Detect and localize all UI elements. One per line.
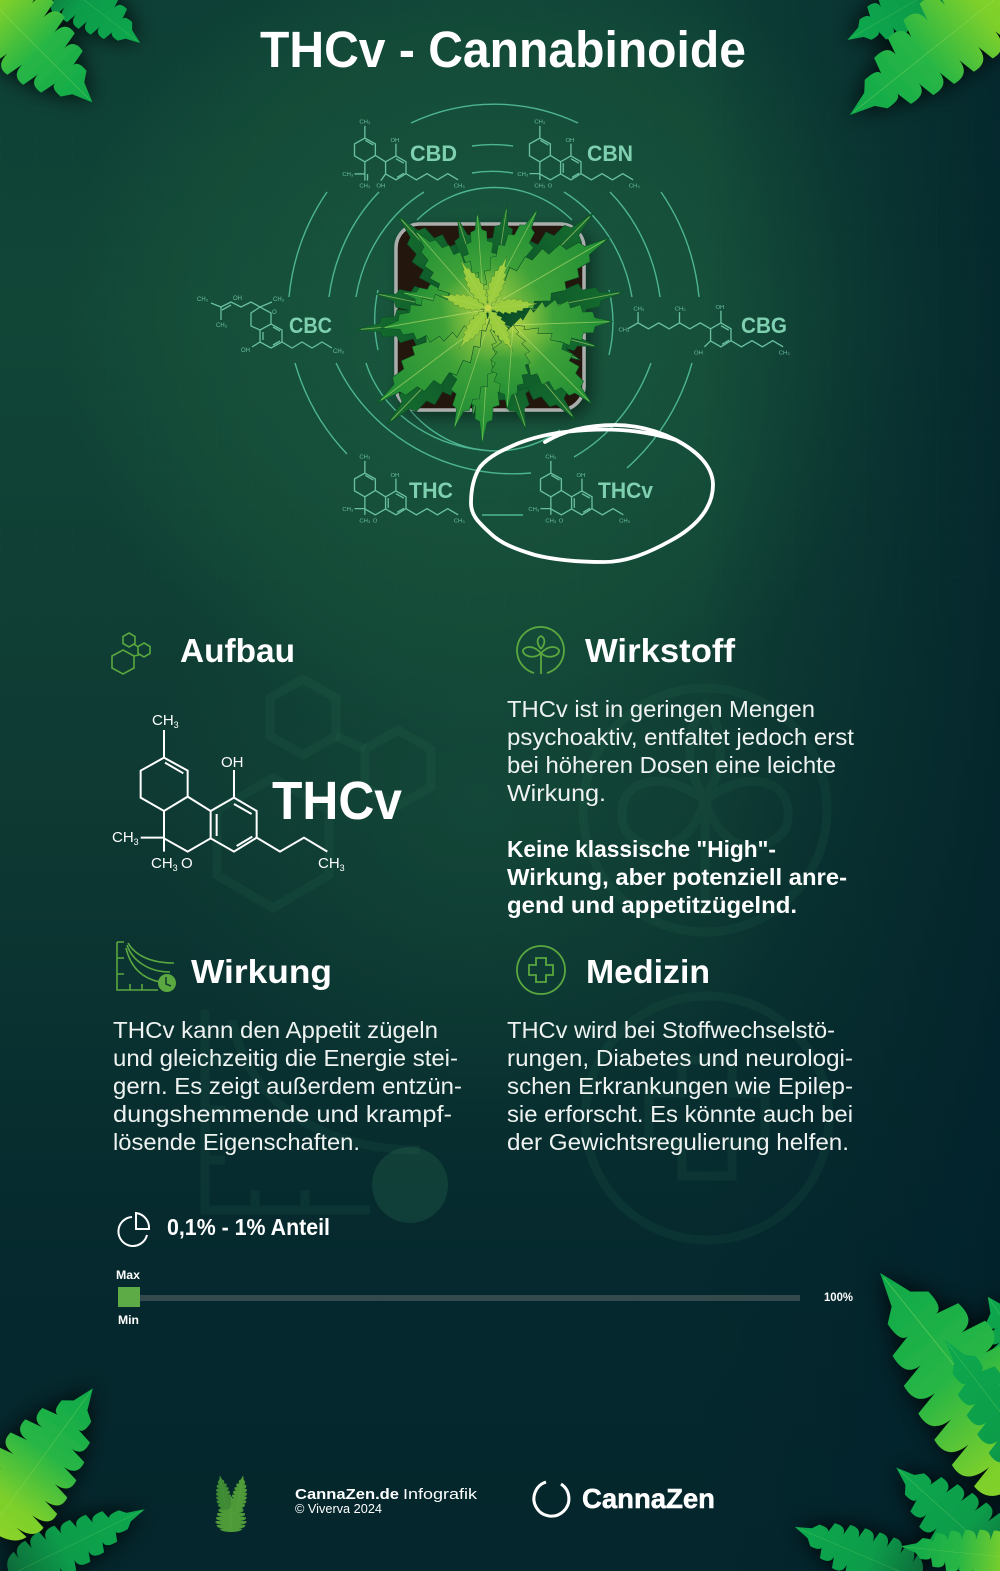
molecule: THCv: CH₃: [528, 507, 540, 513]
molecule: CBN: [517, 120, 640, 189]
label: CBG: CBG: [741, 313, 787, 338]
THCv structure formula: 3: [134, 837, 139, 847]
share bar: [116, 1270, 853, 1327]
corner leaves: top right: [822, 0, 1000, 150]
text: Wirkung: [113, 1017, 462, 1155]
THCv structure formula: OH: [221, 754, 244, 771]
molecule: CBG: OH: [694, 350, 703, 356]
text: Medizin: schen Erkrankungen wie Epilep-: [507, 1073, 853, 1099]
watermark icons: [205, 679, 829, 1240]
icon: plant in circle: [517, 627, 564, 674]
molecule: CBC: OH: [233, 296, 242, 302]
THCv structure formula: O: [181, 855, 193, 872]
molecule: THCv: CH₃: [545, 518, 557, 524]
text: Wirkstoff: THCv ist in geringen Mengen: [507, 696, 815, 722]
molecule: THC: CH₃: [454, 518, 465, 524]
molecule: CBC: CH₃: [273, 297, 285, 303]
cannabis plant: [354, 193, 629, 446]
molecule: CBD: CH₃: [454, 183, 465, 189]
footer credit: © Viverva 2024: [295, 1501, 382, 1516]
molecule: CBC: CH₃: [216, 323, 228, 329]
molecule: THCv: CH₃: [619, 518, 631, 524]
footer credit: [295, 1486, 478, 1516]
heading: Aufbau: Aufbau: [180, 632, 295, 669]
share bar: Max: [116, 1270, 141, 1282]
corner leaves: top left: [0, 0, 158, 134]
THCv structure formula: CH: [112, 829, 134, 846]
text: Wirkstoff: gend und appetitzügelnd.: [507, 892, 797, 918]
share bar: 100%: [824, 1292, 853, 1304]
icon: hexagons: [112, 633, 150, 674]
text: Wirkstoff: bei höheren Dosen eine leichte: [507, 752, 836, 778]
label: THCv: THCv: [598, 478, 654, 503]
molecule: CBD: [342, 120, 465, 189]
text: Medizin: sie erforscht. Es könnte auch bei: [507, 1101, 853, 1127]
footer credit: CannaZen.de: [295, 1486, 399, 1503]
label: CBC: CBC: [289, 313, 332, 338]
icon: pie chart: [118, 1213, 149, 1246]
molecule: CBD: OH: [390, 138, 399, 144]
THCv structure formula: CH: [318, 855, 340, 872]
label: CBN: CBN: [587, 141, 633, 166]
text: Medizin: rungen, Diabetes und neurologi-: [507, 1045, 853, 1071]
THCv structure formula: CH: [151, 855, 173, 872]
molecule: CBN: CH₃: [517, 172, 529, 178]
molecule: CBD: CH₃: [342, 172, 354, 178]
text: Wirkung: lösende Eigenschaften.: [113, 1129, 360, 1155]
text: Medizin: der Gewichtsregulierung helfen.: [507, 1129, 849, 1155]
molecule: THC: CH₃: [359, 518, 371, 524]
share heading: 0,1% - 1% Anteil: [167, 1214, 330, 1240]
CannaZen logo: [534, 1482, 715, 1516]
icon: effect curve chart: [117, 942, 176, 992]
label: THC: THC: [409, 478, 453, 503]
molecule: CBG: CH₃: [619, 327, 630, 333]
heading: Wirkstoff: Wirkstoff: [585, 632, 736, 669]
THCv structure formula: [112, 712, 402, 873]
molecule: CBD: CH₃: [359, 120, 371, 126]
molecule: CBG: CH₃: [779, 350, 790, 356]
molecule: CBD: CH₃: [359, 183, 371, 189]
icon: medical cross: [517, 946, 565, 994]
molecule: THC: [342, 455, 465, 524]
corner leaves: bottom right: [783, 1233, 1000, 1571]
footer credit: Infografik: [403, 1486, 478, 1503]
molecule: CBN: OH: [565, 138, 574, 144]
plant pot: [396, 224, 584, 410]
molecule: CBC: OH: [241, 348, 250, 354]
heading: Wirkung: Wirkung: [191, 953, 332, 990]
molecule: CBG: CH₃: [675, 307, 686, 313]
molecule: THC: CH₃: [342, 507, 354, 513]
molecule: THCv: CH₃: [545, 455, 557, 461]
THCv structure formula: 3: [173, 863, 178, 873]
label: CBD: CBD: [410, 141, 457, 166]
molecule: CBC: O: [272, 310, 277, 316]
THCv structure formula: 3: [174, 720, 179, 730]
text: Wirkstoff: Keine klassische "High"-: [507, 836, 776, 862]
footer leaf logo: [212, 1474, 251, 1532]
molecule: THCv: OH: [576, 473, 585, 479]
concentric arcs: [289, 104, 699, 515]
molecule: CBC: CH₃: [333, 349, 345, 355]
molecule: THCv: [528, 455, 631, 524]
molecule: CBN: CH₃: [534, 183, 546, 189]
molecule: CBG: [619, 305, 790, 356]
text: Medizin: [507, 1017, 853, 1155]
corner leaves: bottom left: [0, 1362, 156, 1571]
THCv structure formula: THCv: [272, 771, 402, 831]
text: Wirkung: dungshemmende und krampf-: [113, 1101, 452, 1127]
text: Wirkstoff: Wirkung.: [507, 780, 606, 806]
heading: Medizin: Medizin: [586, 953, 710, 990]
text: Wirkstoff: [507, 696, 855, 918]
molecule: CBN: CH₃: [534, 120, 546, 126]
THCv structure formula: CH: [152, 712, 174, 729]
text: Wirkstoff: psychoaktiv, entfaltet jedoch erst: [507, 724, 855, 750]
molecule: CBC: [197, 296, 345, 355]
molecule: CBD: OH: [376, 183, 385, 189]
share bar: Min: [118, 1315, 139, 1327]
molecule: CBC: CH₃: [197, 297, 209, 303]
THCv structure formula: 3: [340, 863, 345, 873]
molecule: THC: O: [373, 518, 378, 524]
text: Wirkung: und gleichzeitig die Energie stei-: [113, 1045, 458, 1071]
molecule: CBG: CH₃: [633, 307, 645, 313]
molecule: THC: OH: [390, 473, 399, 479]
text: Medizin: THCv wird bei Stoffwechselstö-: [507, 1017, 835, 1043]
molecule: THCv: O: [559, 518, 564, 524]
hand drawn highlight circle: [471, 425, 713, 562]
text: Wirkung: gern. Es zeigt außerdem entzün-: [113, 1073, 462, 1099]
title: THCv - Cannabinoide: [260, 21, 746, 78]
molecule: THC: CH₃: [359, 455, 371, 461]
molecule: CBG: OH: [715, 305, 724, 311]
text: Wirkung: THCv kann den Appetit zügeln: [113, 1017, 438, 1043]
molecule: CBN: CH₃: [629, 183, 640, 189]
molecule: CBN: O: [548, 183, 553, 189]
CannaZen logo: CannaZen: [582, 1483, 715, 1514]
text: Wirkstoff: Wirkung, aber potenziell anre-: [507, 864, 847, 890]
